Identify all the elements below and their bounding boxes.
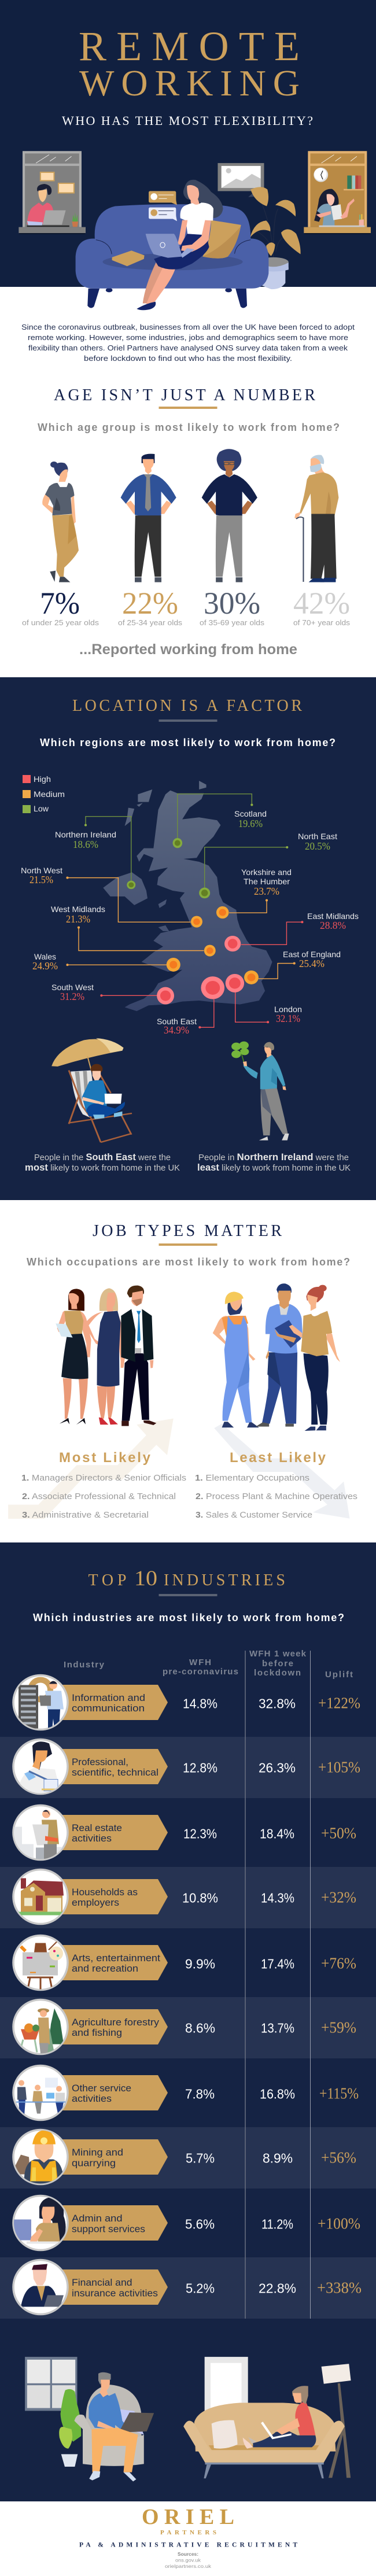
icon: financial adviser [21, 2264, 64, 2306]
West Midlands: West Midlands [51, 905, 105, 914]
row 6: agriculture: Agriculture forestry [72, 2017, 160, 2028]
heading: top 10: TOP [88, 1571, 126, 1589]
most likely list: 2. Associate Professional & Technical [22, 1492, 176, 1501]
arrow up [8, 1419, 174, 1519]
row 6: agriculture: 13.7% [261, 2021, 294, 2036]
caption: most likely region line two: most likely to work from home in the UK [25, 1162, 180, 1173]
row 2: professional, scientific, technical: 12.8% [183, 1761, 218, 1776]
row 1: information and communication: +122% [318, 1695, 360, 1712]
intro paragraph: remote working. However, some industries, jobs and demographics seem to have more [28, 333, 348, 342]
UK map [66, 781, 303, 1028]
row 9: admin: 5.6% [185, 2216, 215, 2231]
East of England: East of England [283, 950, 341, 959]
sofa [76, 204, 268, 308]
row 10: financial [13, 2260, 362, 2315]
stat: under 25: of under 25 year olds [22, 618, 99, 627]
row 6: agriculture: and fishing [72, 2027, 122, 2038]
table row bands [0, 1737, 376, 2319]
heading: top 10: INDUSTRIES [164, 1571, 285, 1589]
professionals group [56, 1286, 156, 1426]
row 3: real estate: activities [72, 1833, 112, 1844]
stat: 70+: of 70+ year olds [293, 618, 351, 627]
reported working from home: ...Reported working from home [79, 641, 297, 658]
table header: before [262, 1659, 293, 1669]
least likely list [195, 1450, 357, 1520]
row 6: agriculture [13, 2000, 356, 2054]
medium markers [167, 906, 259, 984]
title: WORKING [79, 62, 300, 104]
South East: South East [157, 1017, 197, 1026]
most likely list: 3. Administrative & Secretarial [22, 1510, 149, 1520]
least likely list: Least Likely [230, 1450, 326, 1466]
map outline [103, 781, 272, 1011]
legend: High [34, 774, 51, 784]
row 10: financial: 5.2% [186, 2281, 215, 2296]
row 5: arts: +76% [321, 1955, 356, 1972]
heading: job types: JOB TYPES MATTER [93, 1222, 282, 1240]
icon: farmer [20, 2008, 64, 2053]
row 1: information and communication: communication [72, 1703, 145, 1714]
row 9: admin: support services [72, 2223, 145, 2235]
row 7: other services: 16.8% [260, 2087, 295, 2102]
figure: 70+ [294, 455, 338, 582]
East Midlands: 28.8% [320, 920, 346, 931]
age question: Which age group is most likely to work from home? [38, 422, 340, 433]
Northern Ireland: Northern Ireland [55, 830, 116, 839]
North West [21, 866, 62, 885]
wall picture [218, 163, 264, 191]
most likely list [21, 1450, 186, 1520]
row 4: households: Households as [72, 1887, 138, 1898]
least likely list: 2. Process Plant & Machine Operatives [196, 1492, 357, 1501]
row 7: other services: +115% [319, 2084, 359, 2102]
London: London [274, 1005, 302, 1014]
row 7: other services: 7.8% [185, 2087, 215, 2102]
legend: Low [34, 804, 49, 813]
Yorkshire and The Humber: The Humber [244, 877, 290, 886]
Scotland: 19.6% [238, 818, 263, 829]
row 8: mining: 5.7% [186, 2150, 215, 2165]
sources [165, 2551, 212, 2569]
Yorkshire and The Humber: 23.7% [254, 885, 279, 897]
illustration: man in armchair [25, 2357, 154, 2482]
subtitle: WHO HAS THE MOST FLEXIBILITY? [62, 113, 313, 128]
row 5: arts: Arts, entertainment [72, 1953, 160, 1964]
row 3: real estate: +50% [321, 1824, 356, 1841]
row 9: admin: 11.2% [261, 2216, 293, 2231]
icon: estate agent with plans [14, 1810, 67, 1859]
icon: miner [14, 2131, 64, 2184]
stat: under 25: 7% [40, 586, 80, 621]
heading: top 10: 10 [134, 1567, 157, 1590]
table header: WFH [189, 1658, 211, 1667]
row 2: professional, scientific, technical: scientific, technical [72, 1767, 158, 1778]
low markers [127, 838, 210, 898]
South East: 34.9% [164, 1024, 189, 1036]
caption: most likely region: People in the South East were the [34, 1152, 171, 1162]
South West: South West [51, 983, 94, 992]
connector lines [66, 794, 303, 1028]
hero illustration [19, 151, 371, 310]
heading: location: LOCATION IS A FACTOR [72, 697, 302, 715]
illustration: man on deck chair under parasol [51, 1038, 132, 1142]
icon: server and engineer [19, 1677, 64, 1729]
stat: 35-69: 30% [204, 586, 260, 621]
row 5: arts: 17.4% [261, 1956, 294, 1971]
footer logo: ORIEL [142, 2505, 234, 2529]
table header: pre-coronavirus [163, 1667, 238, 1677]
East of England: 25.4% [299, 958, 325, 969]
Northern Ireland [55, 830, 116, 850]
arrow down [214, 1424, 349, 1519]
illustration: man holding four-leaf clover [231, 1042, 289, 1141]
row 1: information and communication: 14.8% [183, 1696, 218, 1711]
row 10: financial: Financial and [72, 2277, 132, 2288]
figure: 25-34 [121, 454, 176, 582]
row 2: professional, scientific, technical: 26.3% [259, 1761, 296, 1776]
manual workers group [213, 1283, 340, 1431]
row 8: mining: quarrying [72, 2157, 116, 2169]
London [274, 1005, 302, 1024]
North East: North East [298, 832, 337, 841]
Wales [32, 952, 58, 972]
stat: 35-69: of 35-69 year olds [200, 618, 265, 627]
stat: 25-34: of 25-34 year olds [118, 618, 183, 627]
sources: orielpartners.co.uk [165, 2563, 212, 2569]
intro paragraph: before lockdown to find out who has the most flexibility. [84, 354, 292, 363]
job illustrations and arrows [8, 1283, 349, 1519]
East Midlands: East Midlands [307, 911, 359, 921]
book [112, 250, 145, 266]
occupations question: Which occupations are most likely to work from home? [27, 1256, 350, 1268]
row 4: households: 14.3% [261, 1890, 294, 1905]
Scotland: Scotland [234, 809, 267, 818]
London: 32.1% [276, 1013, 300, 1024]
row 6: agriculture: +59% [321, 2018, 356, 2036]
intro paragraph: Since the coronavirus outbreak, businesses from all over the UK have been forced to adopt [21, 323, 355, 331]
row 8: mining: +56% [321, 2149, 356, 2167]
figure: 35-69 [202, 449, 257, 582]
footer logo: PARTNERS [160, 2529, 216, 2536]
strapline: PA & ADMINISTRATIVE RECRUITMENT [79, 2541, 297, 2548]
most likely list: 1. Managers Directors & Senior Officials [21, 1473, 186, 1483]
Scotland [234, 809, 267, 829]
row 8: mining: 8.9% [263, 2150, 293, 2165]
row 2: professional, scientific, technical: Professional, [72, 1756, 128, 1767]
legend [23, 774, 65, 813]
row 7: other services: activities [72, 2093, 112, 2104]
West Midlands [51, 905, 105, 925]
icon: scientist [17, 1741, 61, 1793]
table header: Industry [64, 1660, 105, 1670]
North West: 21.5% [30, 874, 53, 885]
row 4: households: employers [72, 1897, 119, 1908]
Yorkshire and The Humber: Yorkshire and [241, 868, 292, 877]
Wales: 24.9% [32, 960, 58, 972]
intro paragraph [21, 323, 355, 363]
heading: top 10 [88, 1567, 285, 1596]
North West: North West [21, 866, 62, 875]
right window with woman [304, 151, 371, 234]
row 1: information and communication [13, 1675, 360, 1729]
North East [298, 832, 337, 852]
row 9: admin: Admin and [72, 2213, 123, 2224]
title: REMOTE [79, 23, 300, 69]
location question: Which regions are most likely to work from home? [40, 737, 336, 748]
row 5: arts: 9.9% [185, 1956, 215, 1971]
table header: Uplift [325, 1670, 353, 1680]
row 10: financial: +338% [317, 2279, 362, 2296]
South West [51, 983, 94, 1002]
stat: under 25 [22, 586, 99, 627]
stat: 25-34: 22% [122, 586, 178, 621]
stat: 70+: 42% [293, 586, 350, 621]
industries question: Which industries are most likely to work from home? [33, 1612, 344, 1623]
row 5: arts [13, 1935, 356, 1990]
age figures [42, 449, 338, 582]
icon: call handler [14, 2197, 66, 2244]
row 9: admin: +100% [318, 2215, 360, 2232]
North East: 20.5% [305, 840, 330, 852]
sources: ons.gov.uk [175, 2557, 201, 2563]
West Midlands: 21.3% [66, 913, 90, 925]
row 1: information and communication: Information and [72, 1692, 145, 1703]
East of England [283, 950, 341, 969]
intro paragraph: flexibility than others. Oriel Partners have analysed ONS survey data taken from a week [28, 344, 348, 352]
Wales: Wales [34, 952, 56, 961]
illustration: woman on sofa [183, 2357, 351, 2478]
table header: lockdown [254, 1668, 301, 1678]
heading: age: AGE ISN’T JUST A NUMBER [54, 386, 315, 404]
row 3: real estate: 18.4% [260, 1826, 294, 1841]
row 8: mining [13, 2130, 356, 2184]
row 9: admin [13, 2195, 360, 2250]
row 7: other services: Other service [72, 2083, 131, 2094]
row 7: other services [13, 2066, 359, 2120]
row 4: households: 10.8% [182, 1890, 218, 1905]
row 5: arts: and recreation [72, 1963, 138, 1974]
legend: Medium [34, 789, 65, 799]
table header: WFH 1 week [249, 1649, 307, 1659]
caption: least likely region: People in Northern Ireland were the [198, 1152, 349, 1162]
row 4: households: +32% [321, 1889, 356, 1906]
row 1: information and communication: 32.8% [259, 1696, 296, 1711]
least likely list: 1. Elementary Occupations [195, 1473, 309, 1483]
South West: 31.2% [60, 991, 84, 1002]
row 10: financial: 22.8% [259, 2281, 296, 2296]
Yorkshire and The Humber [241, 868, 292, 897]
chat bubbles [149, 191, 177, 221]
left window with man [19, 151, 86, 234]
row 6: agriculture: 8.6% [185, 2021, 215, 2036]
row 2: professional, scientific, technical: +105% [318, 1758, 360, 1776]
table header [64, 1649, 353, 1680]
most likely list: Most Likely [59, 1450, 151, 1466]
sources: Sources: [178, 2551, 198, 2557]
caption: least likely region line two: least likely to work from home in the UK [197, 1162, 351, 1173]
Northern Ireland: 18.6% [73, 839, 98, 850]
row 3: real estate: 12.3% [183, 1826, 217, 1841]
woman on laptop [137, 180, 223, 310]
figure: under 25 [42, 462, 79, 582]
row 8: mining: Mining and [72, 2147, 123, 2158]
East Midlands [307, 911, 359, 931]
region labels [21, 809, 359, 1036]
row 4: households [13, 1869, 356, 1924]
icon: house [19, 1879, 64, 1916]
least likely list: 3. Sales & Customer Service [196, 1510, 312, 1520]
title [79, 23, 300, 104]
row 3: real estate: Real estate [72, 1822, 122, 1833]
South East [157, 1017, 197, 1036]
icon: meeting [16, 2077, 66, 2116]
icon: easel and palette [20, 1942, 63, 1990]
row 2: professional, scientific, technical [13, 1740, 360, 1794]
row 10: financial: insurance activities [72, 2288, 158, 2298]
age statistics [22, 586, 351, 627]
row 3: real estate [13, 1806, 356, 1860]
high markers [157, 936, 244, 1005]
pot plant [248, 187, 301, 289]
